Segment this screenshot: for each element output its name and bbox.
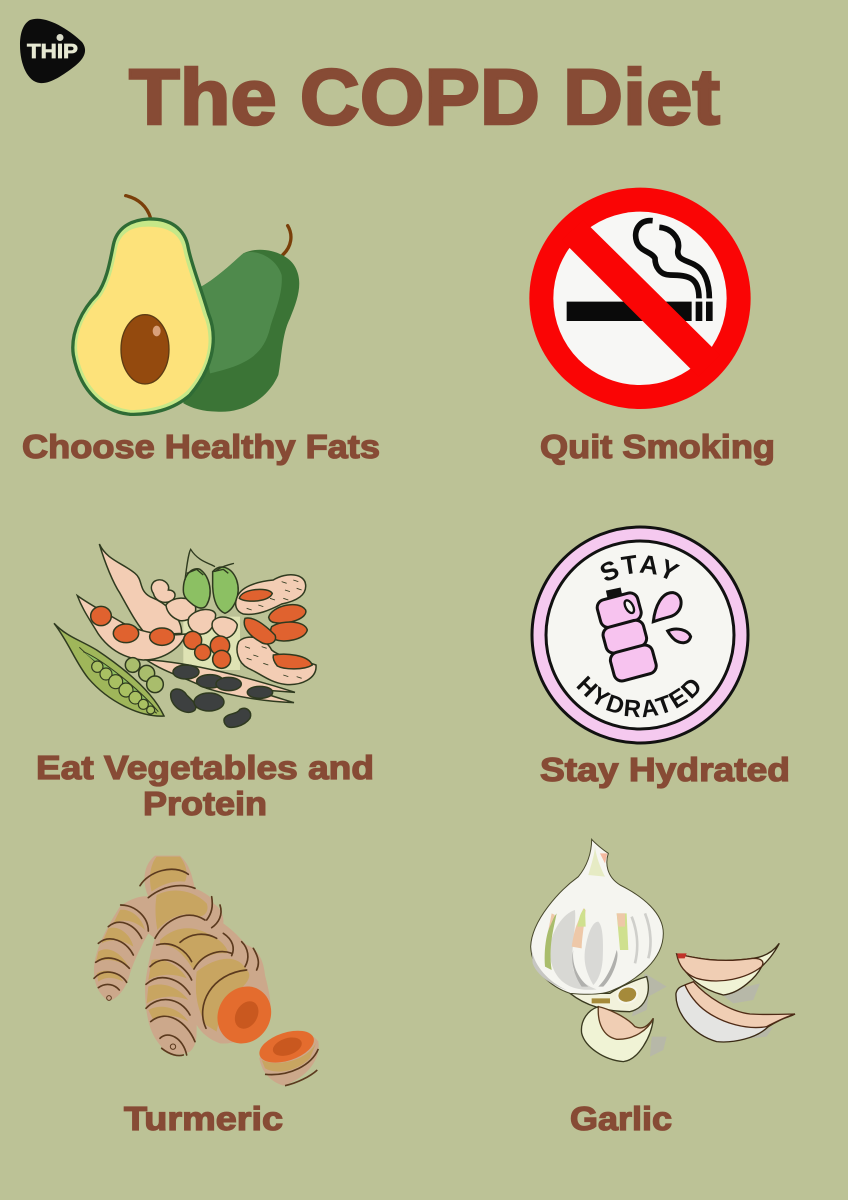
lower pod with red beans (77, 596, 186, 660)
back avocado (283, 226, 291, 255)
icon: bottle (595, 587, 658, 683)
front avocado half (126, 196, 151, 218)
orange beans (239, 589, 312, 669)
puffed beans (151, 580, 237, 638)
avocado pit (121, 315, 169, 384)
label: Eat Vegetables and Protein: Eat Vegetables and (36, 749, 374, 786)
peanuts (236, 575, 316, 685)
pale pod (99, 544, 182, 635)
loose peas (125, 658, 163, 693)
bulb (531, 839, 663, 994)
green pods (183, 569, 210, 608)
label: Turmeric: Turmeric (124, 1100, 283, 1137)
icon: vegetables and protein (54, 544, 316, 727)
root body (94, 856, 270, 1054)
icon: turmeric root (94, 856, 319, 1086)
shadow patches (632, 973, 773, 1057)
pale center backing (183, 617, 240, 670)
icon: stay hydrated badge: HYDRATED (576, 676, 700, 718)
title: The COPD Diet (129, 52, 720, 141)
lower clove (581, 1007, 653, 1062)
smoke (636, 221, 709, 298)
slash (562, 220, 720, 377)
logo: THIP (20, 19, 85, 83)
right upper clove (677, 943, 779, 995)
root highlights (150, 857, 187, 892)
side clove under bulb (570, 977, 648, 1012)
label: Eat Vegetables and Protein (36, 749, 374, 822)
logo: THIP: THIP (27, 41, 78, 63)
cut face (207, 977, 281, 1053)
icon: no smoking sign (529, 188, 751, 409)
bulb shading (549, 910, 597, 990)
icon: avocado (73, 196, 299, 414)
icon: garlic (531, 839, 795, 1062)
right lower clove (676, 985, 795, 1042)
icon: stay hydrated badge: STAY (600, 554, 680, 580)
cigarette (567, 302, 713, 321)
label: Stay Hydrated: Stay Hydrated (540, 751, 790, 788)
label: Quit Smoking: Quit Smoking (540, 428, 775, 465)
label: Choose Healthy Fats: Choose Healthy Fats (22, 428, 380, 465)
long pod with dark beans (147, 660, 295, 703)
label: Garlic: Garlic (570, 1100, 672, 1137)
icon: water drops (653, 593, 691, 643)
label: Eat Vegetables and Protein: Protein (143, 785, 267, 822)
cut slice (255, 1025, 319, 1086)
icon: stay hydrated badge (530, 526, 750, 744)
pea pod (54, 623, 164, 716)
